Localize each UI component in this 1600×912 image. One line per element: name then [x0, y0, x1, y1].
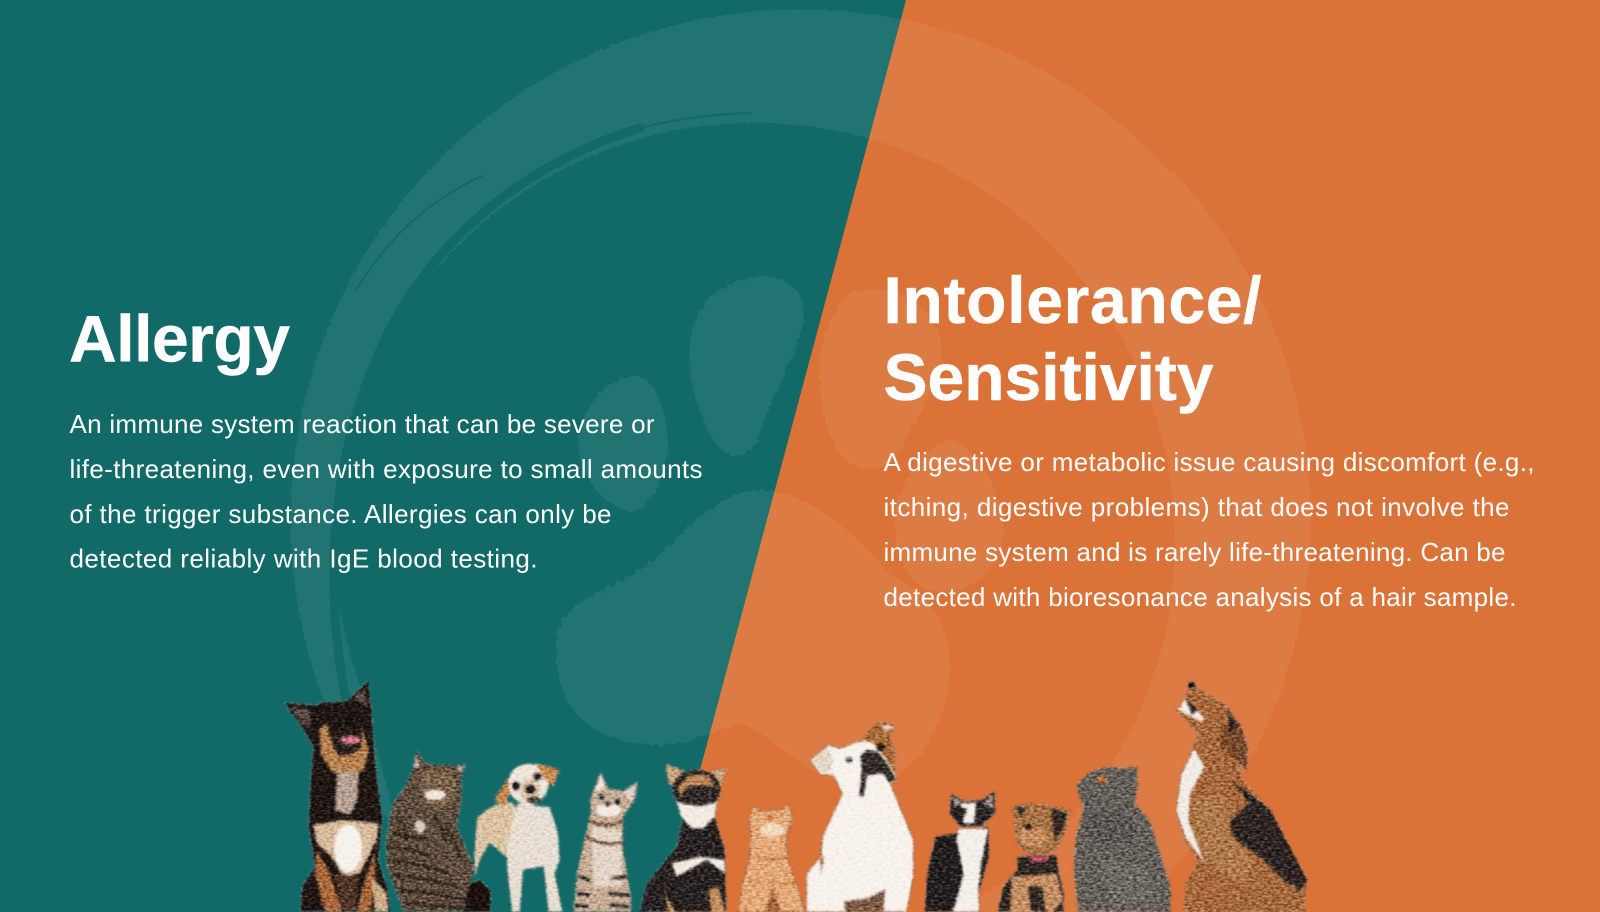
paw toe 3: [819, 289, 942, 469]
text block: intolerance description: immune system and is rarely life-threatening. Can be: [884, 537, 1506, 567]
icon: black and tan dog: [284, 680, 391, 912]
text block: intolerance description: itching, digestive problems) that does not involve the: [884, 492, 1510, 522]
icon: yorkshire terrier: [997, 803, 1070, 912]
paw toe 1: [689, 276, 804, 455]
text block: intolerance description: [884, 447, 1534, 612]
heading: Intolerance/Sensitivity: Intolerance/: [884, 263, 1262, 337]
icon: tuxedo kitten: [924, 791, 996, 912]
panel: orange intolerance background: [662, 0, 1600, 912]
text block: allergy description: detected reliably with IgE blood testing.: [70, 544, 538, 574]
brush ring: [291, 9, 1311, 912]
icon: tan and black dog: [1176, 682, 1307, 912]
icon: striped kitten: [573, 772, 638, 912]
brush ring inner streak: [334, 128, 640, 730]
paw print: [556, 276, 1004, 784]
panel: intolerance text: [884, 263, 1534, 612]
paw toe 2: [578, 376, 668, 512]
icon: brown tabby cat: [386, 750, 491, 912]
icon: grey cat: [1074, 766, 1171, 912]
text block: allergy description: of the trigger substance. Allergies can only be: [70, 499, 612, 529]
brush ring outer streak: [1010, 46, 1170, 170]
heading: Intolerance/Sensitivity: [884, 263, 1262, 414]
icon: ginger kitten: [738, 804, 804, 912]
text block: allergy description: [70, 409, 702, 574]
paw main pad: [556, 490, 950, 784]
heading: Allergy: Allergy: [69, 302, 290, 376]
text block: intolerance description: A digestive or metabolic issue causing discomfort (e.g.,: [884, 447, 1534, 477]
paw toe 4: [895, 440, 1004, 592]
brush ring thin streak: [356, 113, 750, 290]
heading: Intolerance/Sensitivity: Sensitivity: [884, 340, 1214, 414]
watermark: brush ring and paw: [291, 9, 1311, 912]
text block: allergy description: An immune system reaction that can be severe or: [70, 409, 655, 439]
icon: cream puppy: [474, 763, 563, 912]
panel: allergy text: [69, 302, 702, 574]
icon: black and tan puppy: [639, 764, 728, 912]
text block: intolerance description: detected with bioresonance analysis of a hair sample.: [884, 582, 1516, 612]
icon: white bulldog: [806, 722, 914, 912]
text block: allergy description: life-threatening, even with exposure to small amounts: [70, 454, 702, 484]
illustration: row of cats and dogs: [284, 680, 1307, 912]
